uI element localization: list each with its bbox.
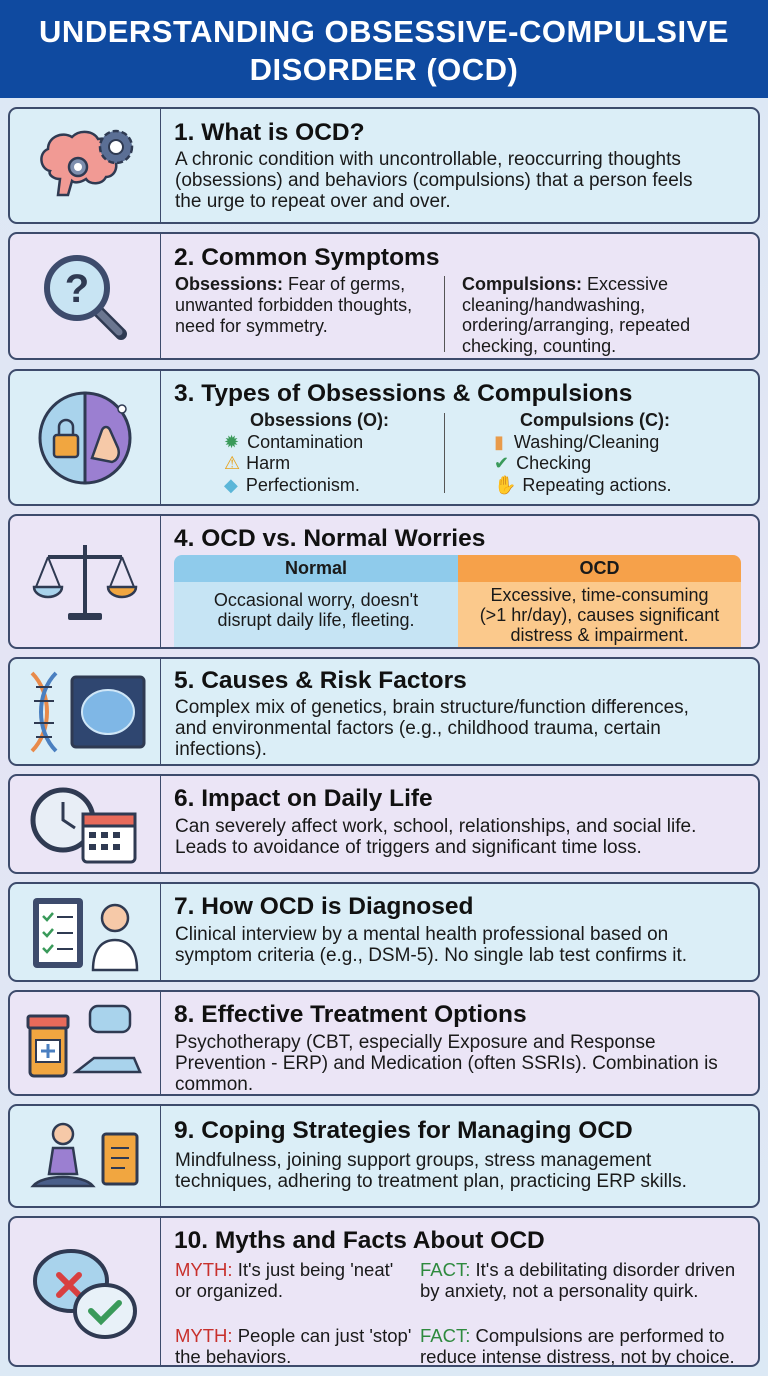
icon: scales	[32, 545, 138, 620]
text 1: A chronic condition with uncontrollable, reoccurring thoughts	[175, 149, 681, 170]
icon: DNA and brain scan	[30, 672, 146, 752]
compulsions text: cleaning/handwashing,	[462, 294, 645, 314]
compulsions list: ✋ Repeating actions.	[494, 474, 672, 494]
panel 1: what is OCD	[8, 107, 760, 224]
panel 8: treatment	[8, 990, 760, 1096]
icon: magnifier question	[44, 255, 127, 340]
icon: meditation and journal	[30, 1122, 138, 1188]
compulsions list	[494, 410, 672, 495]
title: DISORDER (OCD)	[250, 52, 518, 87]
text 5	[175, 697, 689, 760]
text 8	[175, 1032, 718, 1095]
heading 9: 9. Coping Strategies for Managing OCD	[174, 1117, 633, 1144]
text 6: Leads to avoidance of triggers and significant time loss.	[175, 837, 642, 858]
text 9: techniques, adhering to treatment plan, practicing ERP skills.	[175, 1171, 687, 1192]
text 7: symptom criteria (e.g., DSM-5). No single lab test confirms it.	[175, 945, 687, 966]
fact 2: reduce intense distress, not by choice.	[420, 1346, 735, 1367]
text 6	[175, 816, 696, 858]
text 6: Can severely affect work, school, relationships, and social life.	[175, 816, 696, 837]
comparison table: Normal	[285, 558, 347, 578]
myth 1: MYTH: It's just being 'neat'	[175, 1259, 393, 1280]
icon: pill bottle, chat, couch	[26, 1004, 142, 1078]
comparison table: distress & impairment.	[510, 625, 689, 645]
text 8: Psychotherapy (CBT, especially Exposure and Response	[175, 1032, 656, 1053]
compulsions text: ordering/arranging, repeated	[462, 315, 690, 335]
myth 2: MYTH: People can just 'stop'	[175, 1325, 411, 1346]
heading 8: 8. Effective Treatment Options	[174, 1001, 527, 1028]
panel 2: common symptoms	[8, 232, 760, 360]
panel 6: impact	[8, 774, 760, 874]
obsessions list	[224, 410, 389, 494]
text 1	[175, 149, 692, 212]
obsessions text: Obsessions: Fear of germs,	[175, 274, 405, 294]
heading 1: 1. What is OCD?	[174, 119, 365, 146]
heading 5: 5. Causes & Risk Factors	[174, 667, 467, 694]
myth 2	[175, 1325, 411, 1367]
text 1: (obsessions) and behaviors (compulsions) that a person feels	[175, 170, 692, 191]
heading 6: 6. Impact on Daily Life	[174, 785, 433, 812]
obsessions list: Obsessions (O):	[250, 410, 389, 430]
heading 3: 3. Types of Obsessions & Compulsions	[174, 380, 632, 407]
compulsions text	[462, 274, 690, 356]
icon: speech bubbles with x and check	[33, 1249, 137, 1339]
myth 1	[175, 1259, 393, 1301]
fact 2	[420, 1325, 735, 1367]
compulsions list: ✔ Checking	[494, 453, 591, 473]
panel 5: causes	[8, 657, 760, 766]
panel 4: OCD vs normal	[8, 514, 760, 649]
heading 2: 2. Common Symptoms	[174, 244, 439, 271]
comparison table: OCD	[580, 558, 620, 578]
panel 3: types	[8, 369, 760, 506]
text 8: common.	[175, 1074, 253, 1095]
fact 1	[420, 1259, 735, 1301]
obsessions list: ◆ Perfectionism.	[224, 474, 360, 494]
icon: clock and calendar	[30, 788, 136, 864]
compulsions list: Compulsions (C):	[520, 410, 670, 430]
icon: lock and hand	[38, 392, 132, 484]
heading 10: 10. Myths and Facts About OCD	[174, 1227, 545, 1254]
fact 2: FACT: Compulsions are performed to	[420, 1325, 724, 1346]
comparison table	[174, 555, 741, 647]
fact 1: FACT: It's a debilitating disorder driven	[420, 1259, 735, 1280]
obsessions text: unwanted forbidden thoughts,	[175, 295, 412, 315]
text 8: Prevention - ERP) and Medication (often SSRIs). Combination is	[175, 1053, 718, 1074]
text 7	[175, 924, 687, 966]
icon: brain with gears	[40, 130, 134, 196]
panel 9: coping	[8, 1104, 760, 1208]
myth 1: or organized.	[175, 1280, 283, 1301]
text 7: Clinical interview by a mental health professional based on	[175, 924, 668, 945]
compulsions text: Compulsions: Excessive	[462, 274, 668, 294]
obsessions list: ⚠ Harm	[224, 453, 290, 473]
text 9: Mindfulness, joining support groups, stress management	[175, 1150, 651, 1171]
heading 7: 7. How OCD is Diagnosed	[174, 893, 474, 920]
text 5: Complex mix of genetics, brain structure/function differences,	[175, 697, 689, 718]
panel 7: diagnosis	[8, 882, 760, 982]
panel 10: myths and facts	[8, 1216, 760, 1367]
compulsions list: ▮ Washing/Cleaning	[494, 432, 659, 452]
obsessions text	[175, 274, 412, 336]
heading 4: 4. OCD vs. Normal Worries	[174, 525, 485, 552]
text 5: infections).	[175, 739, 267, 760]
obsessions text: need for symmetry.	[175, 316, 328, 336]
comparison table: disrupt daily life, fleeting.	[217, 610, 415, 630]
title: UNDERSTANDING OBSESSIVE-COMPULSIVE	[39, 14, 729, 49]
text 9	[175, 1150, 687, 1192]
comparison table: Occasional worry, doesn't	[214, 590, 418, 610]
myth 2: the behaviors.	[175, 1346, 291, 1367]
comparison table: (>1 hr/day), causes significant	[480, 605, 719, 625]
compulsions text: checking, counting.	[462, 336, 616, 356]
title	[0, 0, 768, 98]
text 5: and environmental factors (e.g., childhood trauma, certain	[175, 718, 661, 739]
comparison table: Excessive, time-consuming	[490, 585, 709, 605]
obsessions list: ✹ Contamination	[224, 432, 363, 452]
fact 1: by anxiety, not a personality quirk.	[420, 1280, 698, 1301]
text 1: the urge to repeat over and over.	[175, 191, 451, 212]
icon: magnifier question: ?	[65, 267, 89, 311]
icon: clipboard and doctor	[33, 898, 138, 972]
